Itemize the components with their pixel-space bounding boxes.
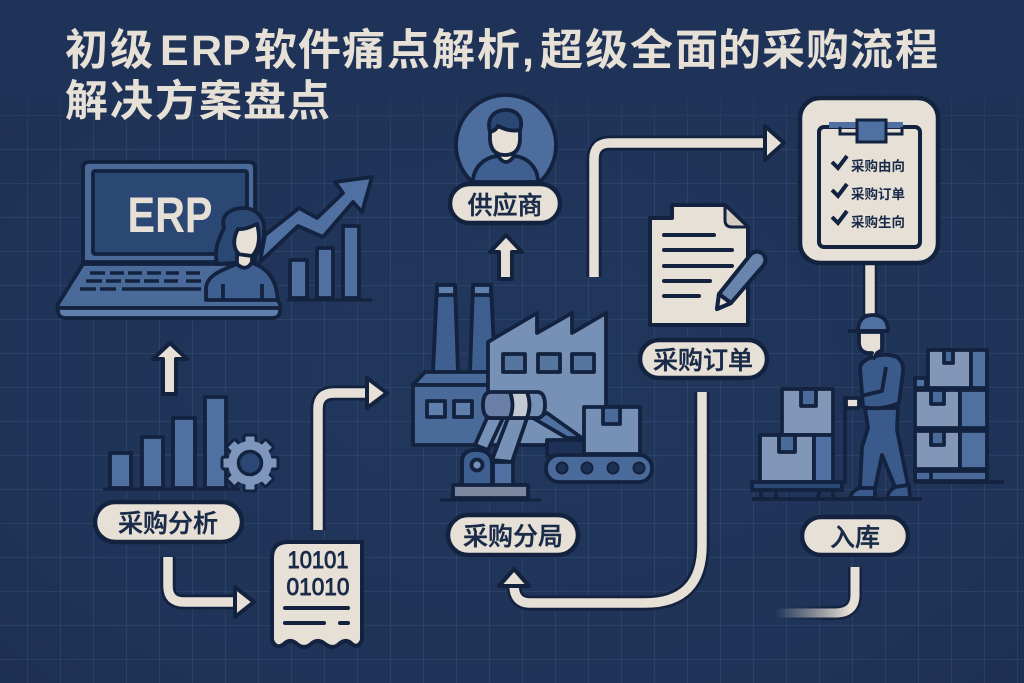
icon: supplier avatar — [456, 95, 556, 195]
label: 供应商 — [450, 184, 560, 223]
arrow: fading tail from warehouse — [775, 567, 855, 613]
checklist items — [832, 156, 905, 230]
bar chart: growth — [288, 226, 371, 300]
label: 采购分析: 采购分析 — [118, 504, 218, 540]
checklist items: 采购生向 — [851, 214, 905, 230]
arrow: factory up to supplier — [490, 235, 522, 279]
checklist items: 采购由向 — [851, 158, 905, 174]
main building — [488, 313, 606, 445]
label: 采购分局 — [448, 515, 578, 555]
label: 采购分局: 采购分局 — [463, 517, 563, 553]
icon: robot arm — [440, 392, 582, 500]
bar chart: purchasing analysis — [103, 397, 240, 489]
icon: ERP laptop — [57, 162, 281, 318]
ERP screen text: ERP — [128, 187, 212, 243]
checklist items: 采购订单 — [851, 187, 905, 202]
icon: factory — [413, 285, 606, 445]
label: 入库: 入库 — [830, 518, 880, 554]
icon: left box stack on cart — [752, 389, 922, 499]
arrow: factory to checklist — [594, 126, 784, 277]
label: 采购订单: 采购订单 — [653, 341, 753, 377]
arrow: receipt up to factory — [318, 378, 387, 530]
label: 采购分析 — [95, 502, 242, 542]
icon: conveyor with box — [546, 407, 652, 482]
icon: right box stack — [915, 350, 1004, 482]
icon: gear — [222, 435, 278, 491]
label: 供应商: 供应商 — [467, 186, 543, 222]
side building — [413, 372, 490, 445]
arrow: up to laptop — [153, 343, 187, 394]
icon: binary receipt: 01010 — [286, 574, 350, 601]
icon: pen — [717, 252, 766, 309]
icon: woman at laptop — [206, 208, 278, 300]
title: 解决方案盘点 — [65, 78, 330, 126]
icon: purchase order document — [650, 205, 766, 325]
arrow: analysis to receipt — [168, 557, 254, 617]
panel: purchase checklist — [800, 98, 938, 263]
title — [65, 27, 938, 126]
icon: binary receipt: 10101 — [288, 547, 348, 574]
icon: rising trend arrow — [260, 177, 372, 262]
title: 初级ERP软件痛点解析,超级全面的采购流程 — [65, 27, 938, 75]
arrow: order back to purchasing bureau — [499, 392, 702, 603]
icon: binary receipt — [272, 542, 362, 647]
connector: checklist to worker — [864, 262, 876, 315]
icon: warehouse worker — [846, 315, 910, 498]
label: 入库 — [802, 517, 908, 555]
chimneys — [433, 285, 495, 372]
